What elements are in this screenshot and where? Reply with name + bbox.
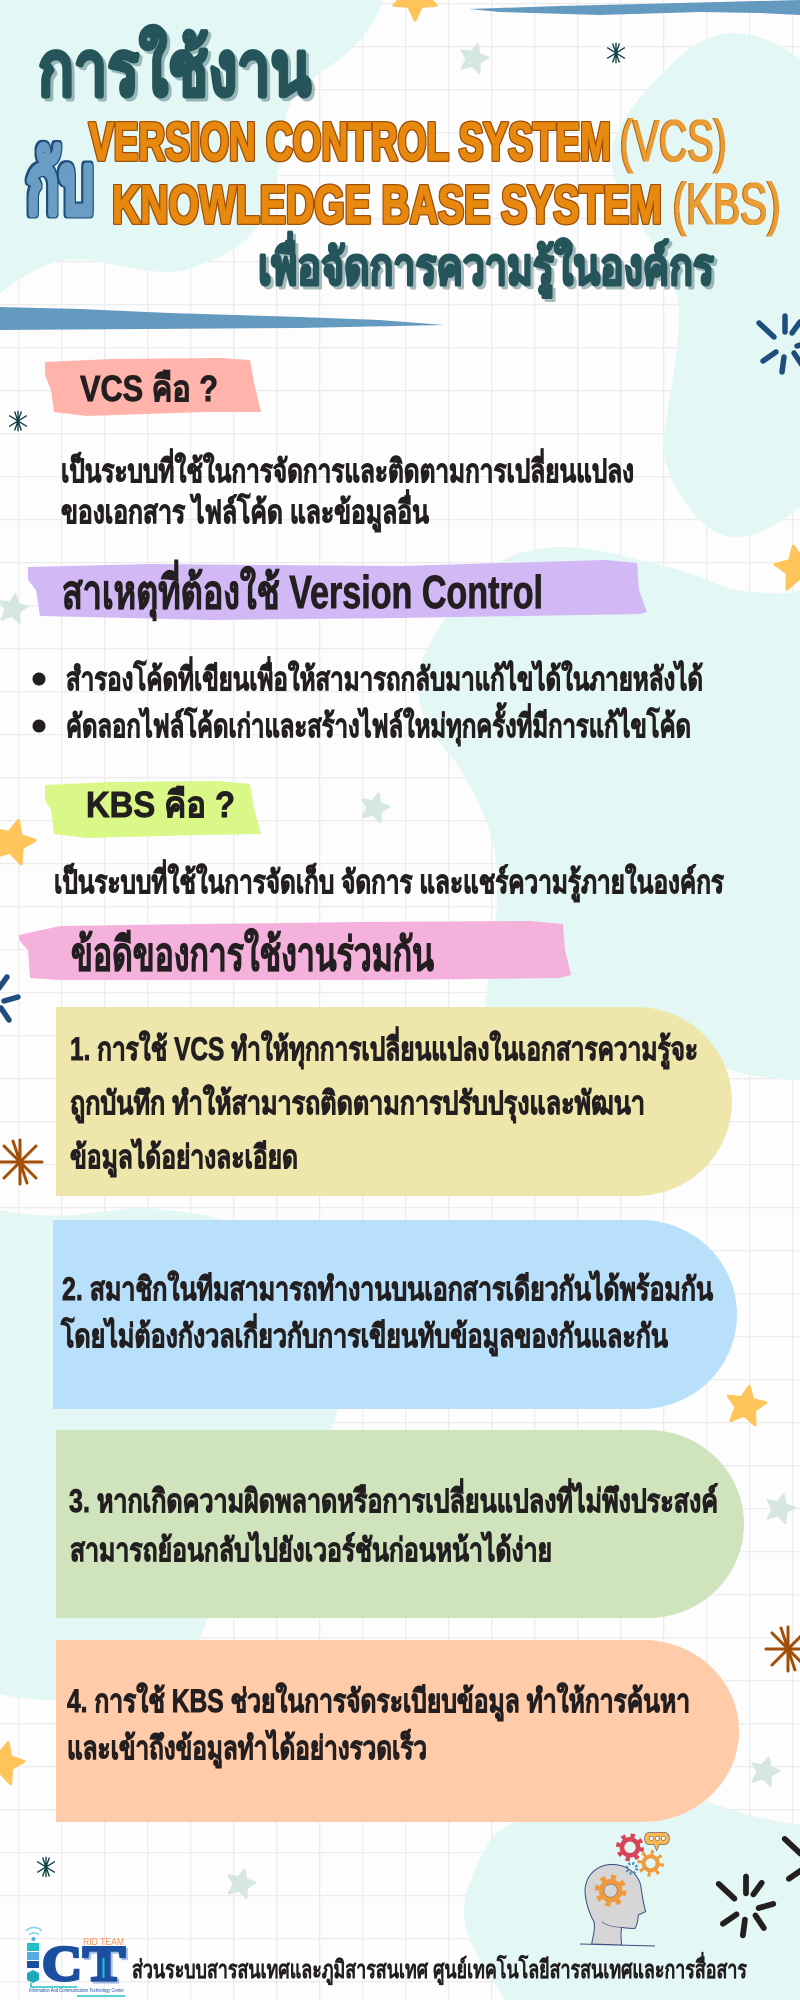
- icon: asterisk top: [607, 43, 625, 63]
- tag: reasons heading: สาเหตุที่ต้องใช้ Version Control: [62, 560, 543, 621]
- decorative brush stroke: under title: [0, 307, 444, 330]
- panel: benefit 1: ข้อมูลได้อย่างละเอียด: [70, 1138, 298, 1178]
- bullet list: reasons: [32, 656, 703, 747]
- icon: brown spark right: [766, 1627, 800, 1671]
- logo: ICT RID team: Information And Communication Technology Center: [29, 1988, 124, 1994]
- icon: pale star 3: [358, 790, 392, 823]
- panel: benefit 4: และเข้าถึงข้อมูลทำได้อย่างรวดเร็ว: [67, 1728, 427, 1769]
- panel: benefit 1: [56, 1007, 732, 1196]
- title line: การใช้งาน: การใช้งาน: [38, 25, 311, 112]
- text block: VCS definition: [61, 448, 634, 533]
- icon: pale star 2: [0, 592, 29, 624]
- icon: brown spark left: [0, 1140, 42, 1184]
- text block: VCS definition: เป็นระบบที่ใช้ในการจัดการและติดตามการเปลี่ยนแปลง: [61, 448, 634, 489]
- tag: benefits heading: ข้อดีของการใช้งานร่วมกัน: [71, 927, 434, 980]
- text block: VCS definition: ของเอกสาร ไฟล์โค้ด และข้อมูลอื่น: [61, 489, 429, 533]
- panel: benefit 4: [56, 1640, 739, 1822]
- panel: benefit 1: ถูกบันทึก ทำให้สามารถติดตามการปรับปรุงและพัฒนา: [70, 1084, 645, 1124]
- icon: yellow star lower left: [0, 1738, 27, 1786]
- icon: yellow star right: [773, 543, 800, 590]
- title block: [26, 25, 781, 298]
- logo: ICT RID team: [26, 1928, 125, 1996]
- icon: navy burst right: [759, 316, 800, 372]
- tag: KBS คือ ?: [45, 781, 261, 838]
- icon: pale star 6: [224, 1866, 258, 1899]
- title: กับ: กับ: [26, 137, 94, 231]
- logo: ICT RID team: RID TEAM: [83, 1937, 124, 1948]
- icon: yellow star top: [394, 0, 436, 20]
- icon: pale star 1: [457, 41, 491, 74]
- icon: yellow star lower right: [724, 1383, 768, 1426]
- icon: yellow star left: [0, 815, 39, 866]
- tag: VCS คือ ?: VCS คือ ?: [80, 368, 218, 409]
- icon: navy burst left: [0, 971, 18, 1027]
- logo: ICT RID team: C: [42, 1935, 82, 1991]
- tag: VCS คือ ?: [45, 358, 261, 416]
- icon: pale star 4: [763, 1491, 797, 1524]
- panel: benefit 2: [53, 1220, 737, 1409]
- icon: black burst: [719, 1877, 773, 1935]
- tag: KBS คือ ?: KBS คือ ?: [86, 784, 235, 825]
- icon: black burst edge: [785, 1832, 800, 1890]
- logo: ICT RID team: T: [83, 1935, 125, 1991]
- panel: benefit 3: สามารถย้อนกลับไปยังเวอร์ชันก่อนหน้าได้ง่าย: [70, 1531, 552, 1568]
- decorative brush stroke: top right: [469, 0, 800, 15]
- icon: asterisk left: [9, 411, 27, 431]
- panel: benefit 3: [56, 1430, 744, 1618]
- icon: asterisk bottom: [37, 1857, 55, 1877]
- icon: head with gears: [580, 1832, 669, 1946]
- icon: pale star 5: [748, 1754, 782, 1787]
- title: (VCS): (VCS): [620, 109, 727, 174]
